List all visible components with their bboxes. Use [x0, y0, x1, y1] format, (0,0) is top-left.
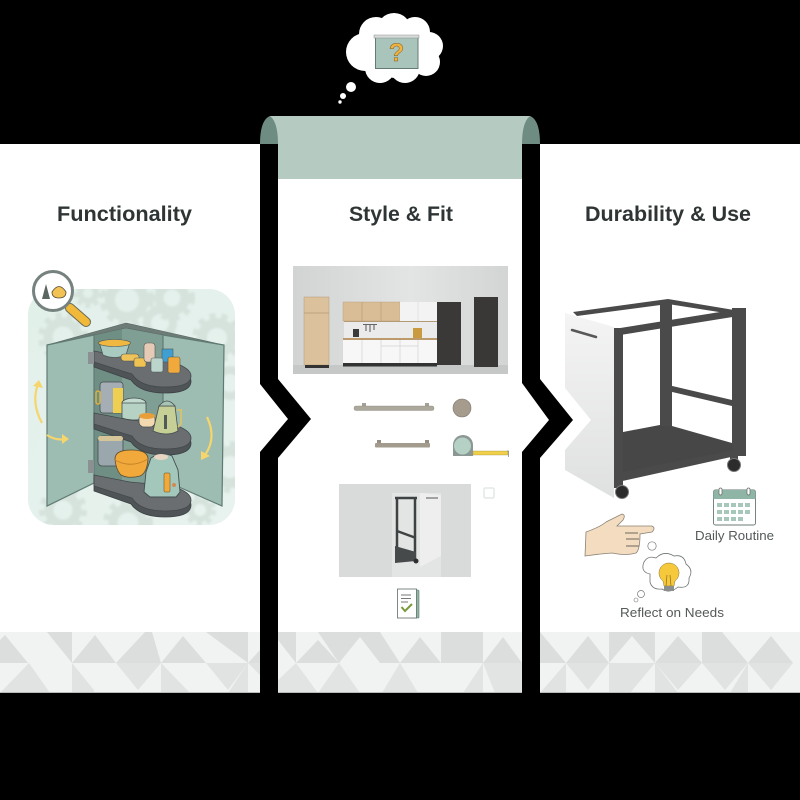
left door — [47, 335, 94, 506]
pattern band: functionality — [0, 632, 260, 693]
bottom shelf with items — [88, 436, 191, 517]
thought cloud with question board — [338, 13, 443, 104]
top shelf with items — [88, 340, 191, 393]
heading: style and fit: Style & Fit — [349, 202, 453, 226]
middle shelf with items — [94, 382, 191, 455]
right door — [163, 335, 224, 506]
magnifier icon — [34, 272, 86, 322]
icon: calendar — [714, 488, 756, 525]
white side panel — [565, 313, 614, 498]
panel: functionality — [0, 144, 288, 693]
pattern band: durability and use — [540, 632, 800, 693]
cabinet frame — [573, 299, 746, 488]
heading: functionality: Functionality — [57, 202, 192, 226]
pale gear background — [28, 289, 235, 525]
pattern band: style and fit — [278, 632, 522, 693]
panel: durability and use — [540, 144, 800, 693]
icon: tape measure — [453, 435, 508, 457]
illustration: corner cabinet with lazy susan shelves — [28, 270, 235, 525]
wheels — [616, 486, 628, 498]
icon: checklist document — [398, 589, 419, 618]
handle option two — [375, 440, 430, 448]
panel: style and fit — [278, 150, 549, 693]
empty checkbox — [484, 488, 494, 498]
illustration: open frame cabinet on wheels — [565, 299, 746, 498]
photo: kitchen layout — [293, 266, 508, 374]
label: reflect on needs: Reflect on Needs — [620, 605, 725, 620]
icon: question board: ? — [389, 39, 404, 67]
icon: idea thought bubble — [634, 542, 691, 602]
handle option one — [354, 403, 434, 410]
knob option — [453, 399, 471, 417]
icon: pointing hand — [585, 514, 654, 556]
cloud shape — [338, 13, 443, 104]
rotation arrows — [33, 380, 212, 460]
cabinet preview — [339, 484, 471, 577]
sage header ribbon — [260, 116, 540, 179]
cabinet interior — [94, 328, 163, 492]
heading: durability and use: Durability & Use — [585, 202, 751, 226]
label: daily routine: Daily Routine — [695, 528, 774, 543]
